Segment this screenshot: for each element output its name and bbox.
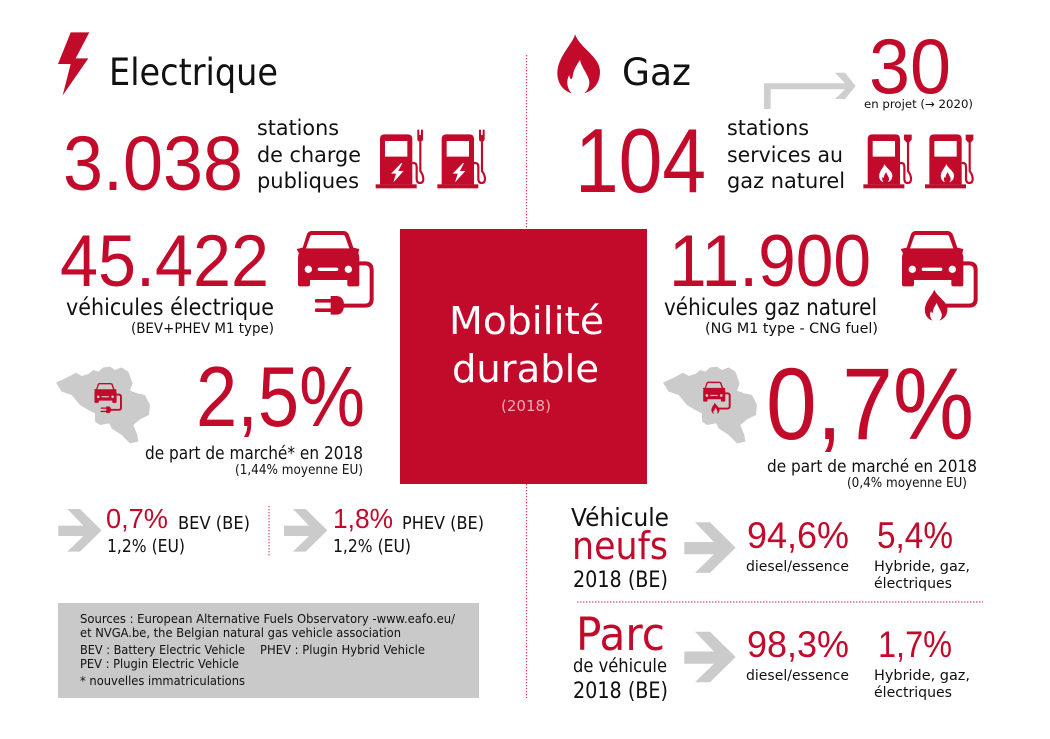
icon: flame (557, 34, 600, 93)
heading: Véhicule neufs 2018 (BE) (571, 503, 669, 593)
heading: Gaz: Gaz (622, 51, 691, 94)
text: stations de charge publiques: de charge (257, 143, 361, 167)
text: stations services au gaz naturel: gaz naturel (727, 169, 845, 193)
arrow: towards planned stations (764, 73, 856, 109)
text: stations de charge publiques (257, 116, 361, 193)
map: Belgium with electric car (56, 367, 150, 443)
stat: parc diesel/essence: diesel/essence (746, 668, 849, 684)
heading: Parc de véhicule 2018 (BE) (573, 608, 668, 704)
panel: sources: Sources : European Alternative Fuels Observatory -www.eafo.eu/ (80, 611, 456, 626)
stat: gas stations count: 104 (575, 111, 706, 212)
panel: sources: PHEV : Plugin Hybrid Vehicle (260, 642, 425, 657)
stat: neufs hybrid, gas, electric (874, 515, 970, 592)
heading: Electrique: Electrique (109, 51, 278, 94)
stat: parc hybrid, gas, electric: 1,7% (878, 624, 952, 665)
heading: Véhicule neufs 2018 (BE): neufs (572, 524, 668, 568)
stat: neufs diesel/essence: diesel/essence (746, 559, 849, 575)
text: stations services au gaz naturel: services au (727, 143, 843, 167)
stat: PHEV share: 1,8% (333, 503, 393, 534)
arrow: neufs (684, 522, 736, 573)
heading: Véhicule neufs 2018 (BE): 2018 (BE) (573, 568, 668, 593)
text: stations de charge publiques: publiques (257, 169, 359, 193)
panel: natural gas vehicles (557, 22, 983, 704)
text: stations services au gaz naturel: stations (727, 116, 809, 140)
text: EU average: (1,44% moyenne EU) (235, 462, 363, 478)
stat: BEV share: BEV (BE) (178, 513, 250, 534)
stat: PHEV share: PHEV (BE) (402, 513, 484, 534)
text: market share caption: de part de marché* en 2018 (145, 444, 363, 464)
heading: Parc de véhicule 2018 (BE): Parc (576, 608, 665, 661)
arrow: parc (684, 632, 736, 682)
icon: electric car with plug (297, 231, 372, 315)
text: véhicules électrique: véhicules électrique (66, 295, 274, 321)
panel: sources: * nouvelles immatriculations (80, 673, 245, 688)
panel: Mobilité durable: (2018) (501, 397, 551, 415)
stat: planned stations: 30 (869, 22, 951, 110)
stat: charging stations count: 3.038 (63, 121, 243, 207)
panel: sources: BEV : Battery Electric Vehicle (80, 642, 245, 657)
panel: sources: et NVGA.be, the Belgian natural gas vehicle association (80, 625, 401, 640)
stat: neufs hybrid, gas, electric: électriques (874, 576, 952, 592)
stat: PHEV share: 1,2% (EU) (333, 536, 411, 557)
panel: Mobilité durable: Mobilité (449, 299, 604, 343)
stat: BEV share: 0,7% (106, 503, 168, 534)
text: en projet: en projet (→ 2020) (864, 97, 973, 111)
stat: BEV share (106, 503, 250, 557)
text: NG M1 type: (NG M1 type - CNG fuel) (705, 321, 878, 337)
stat: parc hybrid, gas, electric (874, 624, 970, 701)
heading: Véhicule neufs 2018 (BE): Véhicule (571, 503, 669, 532)
stat: neufs diesel/essence (746, 515, 849, 575)
stat: gas vehicles count: 11.900 (669, 221, 871, 302)
text: BEV+PHEV M1 type: (BEV+PHEV M1 type) (131, 321, 274, 337)
icon: gas car with flame (901, 231, 976, 321)
stat: BEV share: 1,2% (EU) (107, 536, 185, 557)
panel: sources: PEV : Plugin Electric Vehicle (80, 656, 239, 671)
stat: gas market share: 0,7% (766, 347, 974, 461)
panel: sources (58, 603, 479, 698)
icon: lightning bolt (58, 32, 89, 95)
stat: electric market share: 2,5% (196, 350, 365, 445)
text: stations services au gaz naturel (727, 116, 845, 193)
heading: Parc de véhicule 2018 (BE): 2018 (BE) (573, 679, 668, 704)
text: EU average: (0,4% moyenne EU) (847, 475, 967, 491)
panel: Mobilité durable (400, 229, 647, 484)
stat: parc diesel/essence (746, 624, 849, 684)
icon: electric charging pumps (376, 130, 485, 188)
panel: electric vehicles (56, 32, 485, 698)
stat: parc hybrid, gas, electric: électriques (874, 685, 952, 701)
stat: neufs diesel/essence: 94,6% (747, 515, 849, 556)
text: market share caption: de part de marché en 2018 (767, 457, 977, 477)
text: stations de charge publiques: stations (257, 116, 339, 140)
stat: electric vehicles count: 45.422 (60, 221, 269, 302)
stat: neufs hybrid, gas, electric: Hybride, gaz, (874, 559, 970, 575)
stat: neufs hybrid, gas, electric: 5,4% (877, 515, 953, 556)
text: véhicules gaz naturel: véhicules gaz naturel (664, 295, 877, 321)
heading: Parc de véhicule 2018 (BE): de véhicule (573, 655, 667, 677)
stat: parc hybrid, gas, electric: Hybride, gaz, (874, 668, 970, 684)
arrow: PHEV (284, 509, 327, 552)
panel: Mobilité durable: durable (452, 347, 599, 391)
stat: PHEV share (333, 503, 484, 557)
icon: gas pumps (863, 134, 973, 188)
arrow: BEV (58, 509, 102, 552)
stat: parc diesel/essence: 98,3% (747, 624, 849, 665)
map: Belgium with gas car (663, 367, 757, 443)
